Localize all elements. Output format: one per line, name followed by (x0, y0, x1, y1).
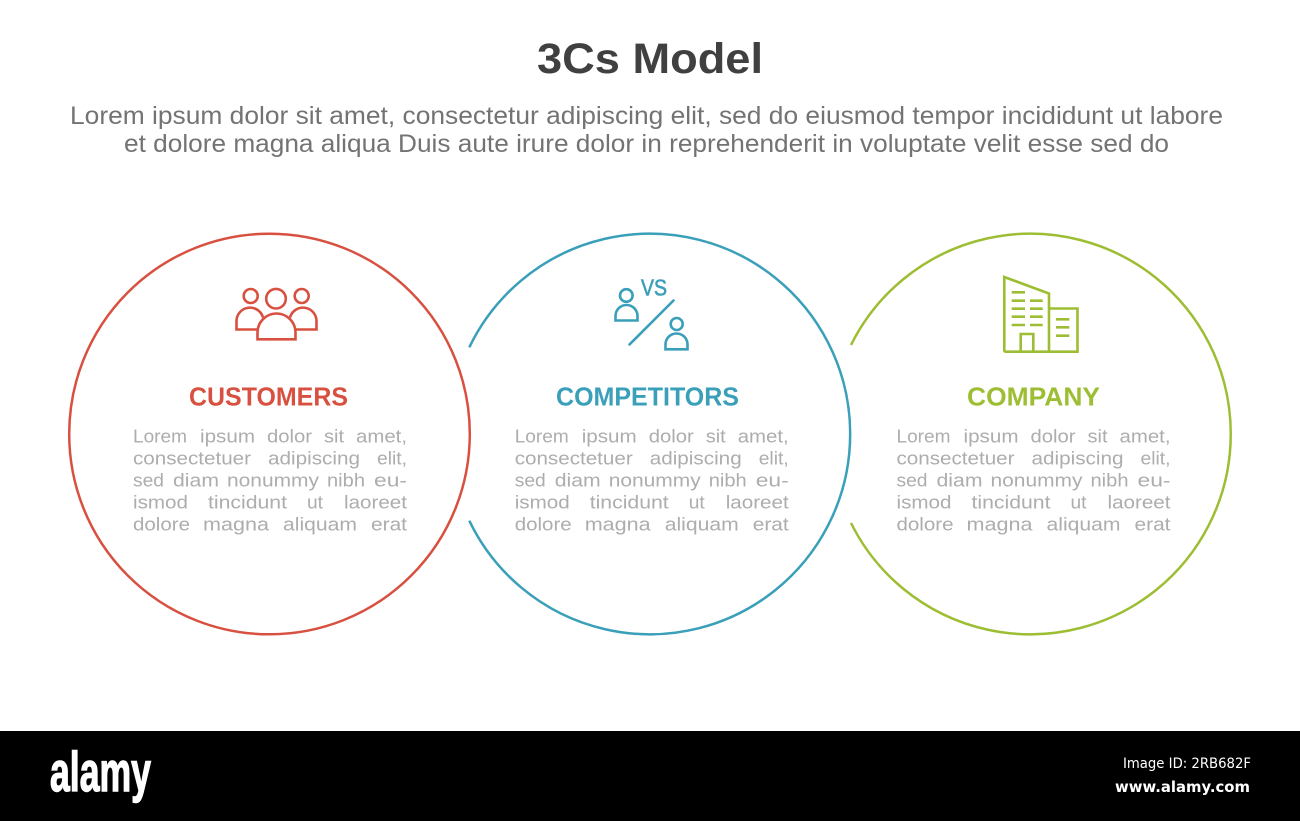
company heading: COMPANY (967, 384, 1100, 412)
panel: customers (69, 234, 470, 634)
customers body text: ipsum (200, 426, 255, 446)
company body text: eu- (1138, 470, 1170, 490)
customers body text: adipiscing (268, 448, 360, 468)
subtitle text block: et dolore magna aliqua Duis aute irure dolor in reprehenderit in voluptate velit esse sed do (124, 130, 1169, 158)
company body text (896, 426, 1170, 534)
customers body text: Lorem (133, 426, 187, 446)
company body text: dolore (896, 514, 954, 534)
customers body text: sed (133, 470, 164, 490)
customers body text: dolore (133, 514, 190, 534)
customers body text: consectetuer (133, 448, 251, 468)
competitors body text: nonummy (609, 470, 702, 490)
competitors body text: adipiscing (650, 448, 742, 468)
company body text: magna (966, 514, 1033, 534)
competitors body text: dolore (515, 514, 572, 534)
customers body text: aliquam (283, 514, 357, 534)
title: 3Cs Model (537, 35, 763, 83)
icon: customers group (236, 289, 316, 339)
company body text: dolor (1030, 426, 1076, 446)
icon: versus people: VS (641, 274, 667, 300)
company body text: consectetuer (896, 448, 1014, 468)
panel: competitors (469, 234, 850, 634)
company body text: ipsum (964, 426, 1018, 446)
customers body text: nonummy (227, 470, 320, 490)
competitors body text: laoreet (726, 492, 789, 512)
image id: Image ID: 2RB682F (1123, 756, 1251, 772)
competitors body text: ipsum (582, 426, 637, 446)
competitors body text: ismod (515, 492, 570, 512)
company body text: adipiscing (1032, 448, 1124, 468)
subtitle text block: Lorem ipsum dolor sit amet, consectetur adipiscing elit, sed do eiusmod tempor incididunt ut labore (70, 102, 1223, 130)
footer watermark band (0, 731, 1300, 821)
competitors body text: amet, (738, 426, 789, 446)
competitors body text: Lorem (515, 426, 569, 446)
competitors body text: erat (753, 514, 789, 534)
customers body text: erat (371, 514, 407, 534)
competitors body text: tincidunt (590, 492, 669, 512)
competitors body text: ut (689, 492, 705, 512)
competitors body text: eu- (756, 470, 789, 490)
competitors body text: sit (706, 426, 726, 446)
customers body text: eu- (374, 470, 407, 490)
company body text: erat (1134, 514, 1170, 534)
customers ring (69, 234, 470, 634)
company body text: ut (1070, 492, 1086, 512)
customers body text: ismod (133, 492, 188, 512)
subtitle text block (70, 102, 1223, 158)
company body text: sed (896, 470, 928, 490)
competitors heading: COMPETITORS (556, 384, 739, 412)
website: www.alamy.com (1115, 778, 1250, 796)
customers body text: diam (173, 470, 219, 490)
customers body text: dolor (267, 426, 312, 446)
competitors body text: magna (585, 514, 652, 534)
company body text: amet, (1120, 426, 1170, 446)
company body text: diam (936, 470, 982, 490)
company ring (851, 234, 1231, 634)
customers body text: elit, (377, 448, 407, 468)
panel: company (851, 234, 1231, 634)
competitors body text: aliquam (665, 514, 739, 534)
competitors body text: consectetuer (515, 448, 633, 468)
competitors body text: diam (555, 470, 601, 490)
competitors body text (515, 426, 789, 534)
customers body text: magna (203, 514, 270, 534)
company body text: nonummy (990, 470, 1083, 490)
company body text: ismod (896, 492, 952, 512)
customers heading: CUSTOMERS (189, 384, 348, 412)
customers body text: ut (307, 492, 323, 512)
customers body text: tincidunt (208, 492, 287, 512)
company body text: Lorem (896, 426, 950, 446)
competitors body text: nibh (709, 470, 747, 490)
competitors ring (469, 234, 850, 634)
competitors body text: sed (515, 470, 546, 490)
icon: company buildings (1004, 277, 1078, 352)
company body text: elit, (1140, 448, 1170, 468)
alamy logo: alamy (50, 740, 151, 803)
company body text: tincidunt (972, 492, 1050, 512)
competitors body text: dolor (649, 426, 694, 446)
company body text: sit (1088, 426, 1108, 446)
customers body text (133, 426, 407, 534)
company body text: laoreet (1108, 492, 1170, 512)
customers body text: nibh (327, 470, 365, 490)
company body text: nibh (1090, 470, 1128, 490)
customers body text: sit (324, 426, 344, 446)
competitors body text: elit, (759, 448, 789, 468)
icon: versus people (616, 274, 688, 349)
company body text: aliquam (1046, 514, 1120, 534)
customers body text: laoreet (344, 492, 407, 512)
customers body text: amet, (356, 426, 407, 446)
